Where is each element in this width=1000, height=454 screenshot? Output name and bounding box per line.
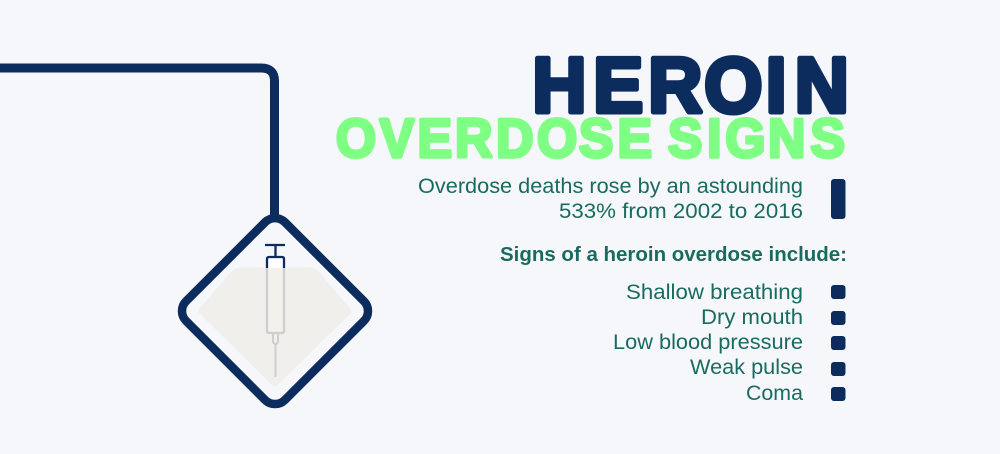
signs heading: Signs of a heroin overdose include: xyxy=(500,243,847,266)
syringe xyxy=(265,245,285,377)
diamond frame with syringe xyxy=(176,212,374,410)
title: heroin: HEROIN xyxy=(532,43,849,129)
list bullets xyxy=(831,285,846,401)
diamond outline xyxy=(176,212,374,410)
signs list xyxy=(613,281,803,405)
connector line xyxy=(0,68,274,218)
statistic text xyxy=(418,175,803,223)
signs list: Coma xyxy=(746,382,803,405)
signs list: Dry mouth xyxy=(701,306,803,329)
signs list: Weak pulse xyxy=(690,356,803,379)
statistic text: Overdose deaths rose by an astounding xyxy=(418,175,803,198)
signs list: Shallow breathing xyxy=(626,281,803,304)
statistic text: 533% from 2002 to 2016 xyxy=(559,200,803,223)
signs list: Low blood pressure xyxy=(613,331,803,354)
beige powder shape xyxy=(198,267,352,386)
subtitle: overdose signs: OVERDOSE SIGNS xyxy=(336,109,845,170)
statistic marker xyxy=(831,179,846,219)
